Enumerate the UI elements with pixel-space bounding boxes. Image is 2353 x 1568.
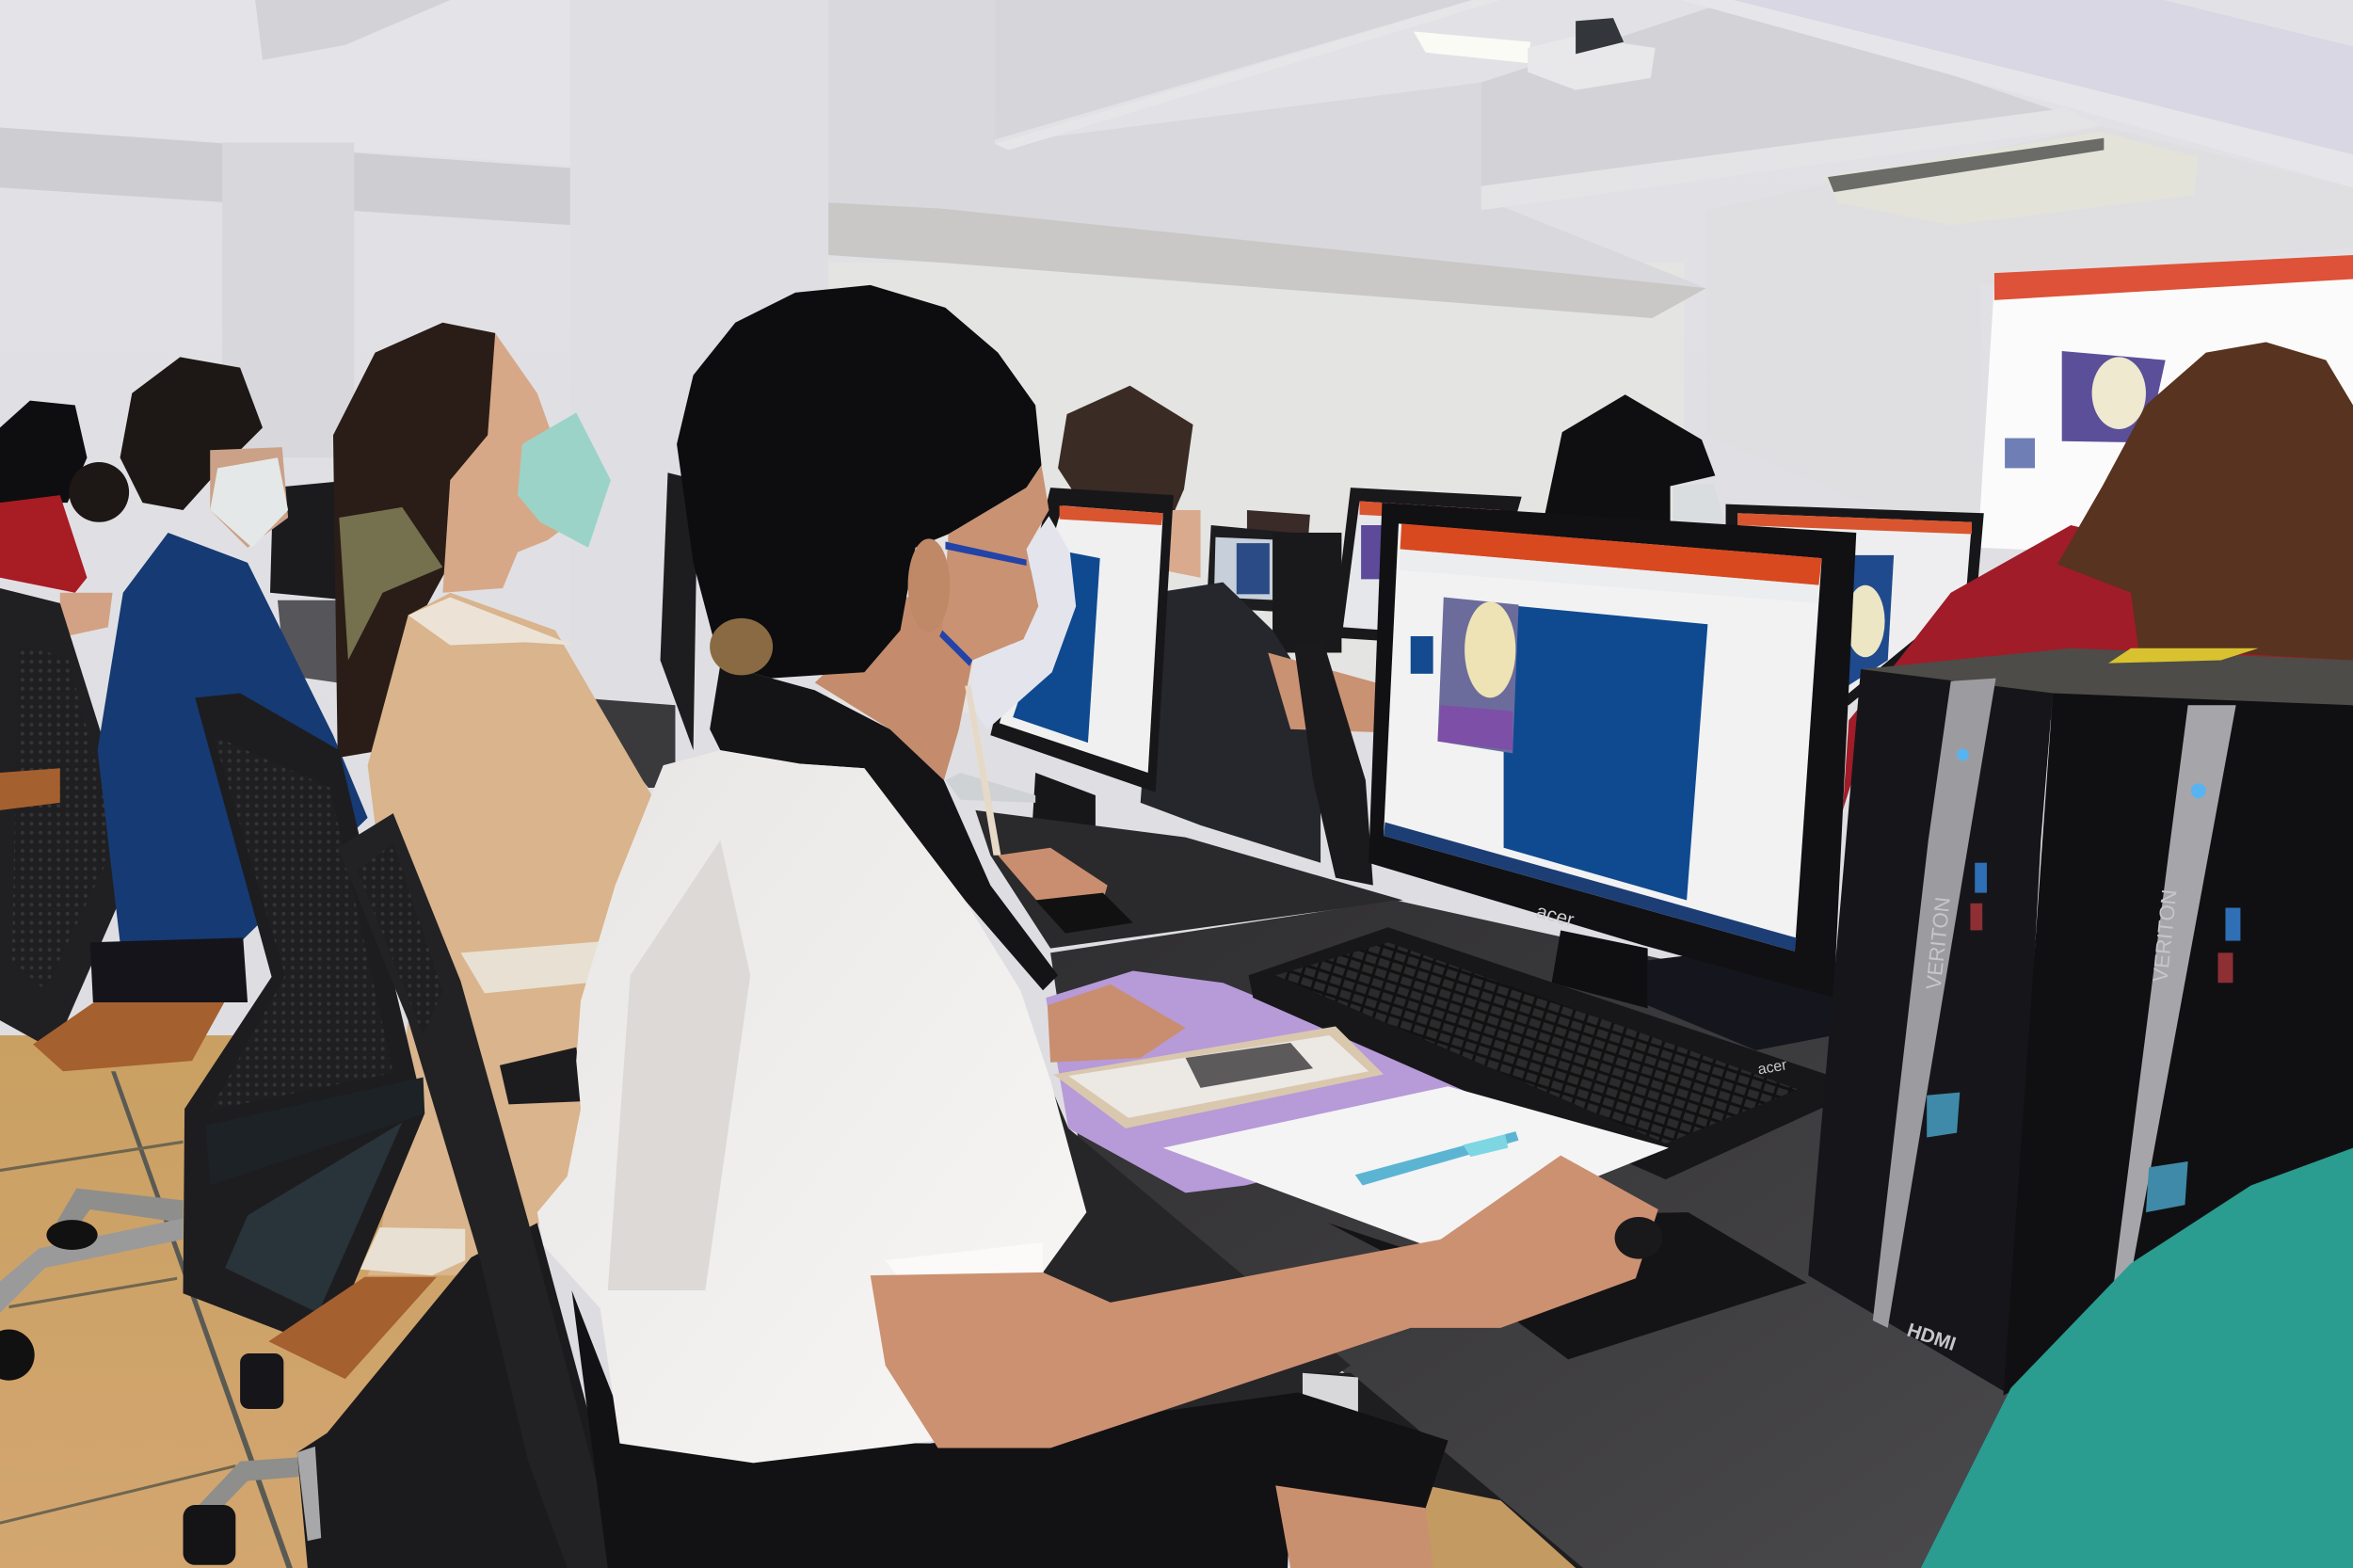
face — [942, 465, 1048, 660]
skirt and lap — [571, 1290, 1449, 1568]
brand label: Veriton left: VERITON — [1922, 896, 1955, 991]
shadow under desk — [1035, 1050, 1351, 1463]
person: woman in red at right — [1843, 342, 2353, 810]
main desk — [1050, 901, 2048, 1568]
person: woman in beige blouse with teal mask — [333, 323, 661, 1275]
lace trim at hem — [360, 1227, 465, 1275]
mask straps — [939, 542, 1027, 666]
tablet — [1053, 1026, 1384, 1128]
foreground teal shirt — [1921, 1148, 2353, 1568]
far desk clutter behind beige blouse — [578, 697, 675, 788]
pen — [1355, 1131, 1519, 1185]
hair — [677, 285, 1042, 679]
brand label: Veriton right: VERITON — [2148, 888, 2182, 984]
left hand on tablet — [1048, 984, 1186, 1063]
far monitors and desks — [270, 472, 1341, 750]
cable clutter — [1648, 937, 1833, 1050]
person: woman in red at far left — [0, 401, 113, 638]
PC towers: Acer Veriton — [1808, 648, 2353, 1396]
purple folder — [1046, 970, 1515, 1192]
projection screen — [1977, 255, 2353, 563]
blouse — [537, 750, 1086, 1463]
hair tie — [710, 618, 773, 675]
mouse — [1615, 1217, 1663, 1259]
right arm and hand on mouse — [871, 1156, 1658, 1448]
air conditioner — [1823, 132, 2199, 225]
keyboard — [1249, 927, 1826, 1179]
wall columns — [222, 0, 828, 705]
projector — [1528, 18, 1656, 90]
paper sheet — [1163, 1086, 1669, 1245]
chair: second — [184, 694, 437, 1565]
person: woman in blue shirt — [69, 357, 368, 1002]
brand label on keyboard: acer — [1756, 1057, 1789, 1078]
chair: main — [297, 813, 631, 1568]
monitor: middle — [945, 488, 1174, 843]
brand label: acer: acer — [1534, 901, 1577, 931]
port label: HDMI: HDMI — [1904, 1320, 1959, 1355]
person: main woman in white blouse — [297, 285, 1663, 1568]
floor with tile grid — [0, 1035, 480, 1568]
person: woman in dark floral shirt — [1058, 386, 1376, 863]
monitor: back center — [1333, 488, 1522, 648]
cabinet and floor under desk — [1290, 1373, 1583, 1568]
lace trim at waist — [460, 941, 609, 993]
face mask — [972, 516, 1076, 729]
mouse and hand at rear desk — [998, 848, 1133, 934]
ceiling light — [1414, 31, 1530, 63]
mouse pad — [1328, 1212, 1807, 1359]
monitor: right — [1726, 504, 1984, 705]
rear desk — [975, 810, 1403, 949]
person: far back seated woman, hair — [1545, 394, 1726, 525]
ear — [908, 538, 950, 632]
chair: far left — [0, 588, 225, 1381]
monitor: main acer — [1369, 503, 1856, 1008]
bead strap — [965, 686, 1000, 856]
black chair behind main monitor — [1293, 642, 1373, 886]
ponytail — [710, 664, 1058, 990]
neck — [815, 545, 1035, 780]
